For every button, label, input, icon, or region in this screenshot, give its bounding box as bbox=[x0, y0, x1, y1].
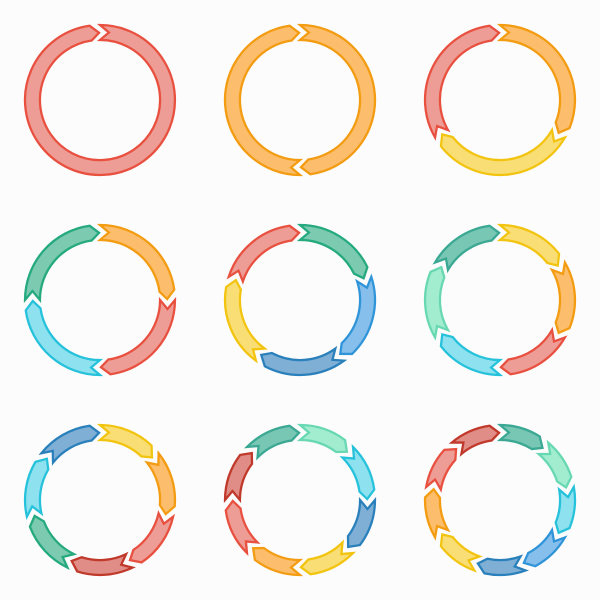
segment: red bbox=[426, 445, 457, 491]
segment: orange right bbox=[300, 25, 375, 174]
segment: cyan bbox=[26, 301, 100, 375]
segment: blue bbox=[523, 525, 565, 574]
segment: red bbox=[500, 317, 565, 389]
ring: eight segments bbox=[214, 414, 386, 586]
segment: dark red bbox=[452, 415, 500, 461]
segment: dark red bbox=[225, 453, 252, 500]
segment: red bbox=[214, 501, 266, 553]
segment: orange bbox=[414, 489, 456, 537]
segment: red bbox=[229, 213, 300, 293]
ring: four segments bbox=[25, 225, 175, 375]
segment: orange bbox=[133, 453, 191, 514]
ring: nine segments bbox=[414, 415, 581, 585]
segment: dark blue bbox=[41, 413, 99, 473]
segment: orange bbox=[500, 25, 575, 133]
ring: two segments bbox=[225, 25, 375, 175]
segment: cyan bbox=[334, 447, 386, 499]
segment: dark red bbox=[72, 538, 133, 590]
segment: dark blue bbox=[477, 548, 526, 585]
segment: dark blue bbox=[348, 500, 375, 547]
ring: one segment bbox=[25, 25, 175, 175]
segment: cyan bbox=[15, 459, 58, 517]
segment: orange bbox=[530, 263, 594, 334]
segment: red bbox=[398, 19, 528, 137]
segment: orange bbox=[100, 225, 174, 299]
segment: dark blue bbox=[258, 318, 344, 400]
ring: seven segments bbox=[15, 413, 191, 590]
segment: orange bbox=[253, 548, 300, 575]
segment: mint bbox=[406, 266, 470, 337]
segment: green bbox=[300, 225, 367, 278]
segment: red bbox=[130, 509, 173, 567]
segment: yellow bbox=[100, 425, 152, 457]
ring: three segments bbox=[398, 19, 575, 202]
segment: red bbox=[101, 300, 175, 374]
ring: six segments bbox=[406, 211, 594, 389]
segment: orange left bbox=[225, 26, 300, 175]
segment: mint bbox=[300, 425, 347, 452]
segment: red bbox=[25, 25, 175, 175]
segment: teal bbox=[500, 425, 542, 449]
segment: yellow bbox=[500, 225, 559, 266]
segment: mint bbox=[533, 443, 581, 488]
ring: five segments bbox=[201, 213, 392, 400]
segment: cyan bbox=[550, 487, 581, 533]
segment: yellow bbox=[201, 278, 287, 361]
segment: teal bbox=[435, 211, 500, 283]
segment: cyan bbox=[441, 334, 500, 375]
segment: blue bbox=[321, 277, 392, 357]
segment: yellow bbox=[301, 534, 353, 586]
segment: yellow bbox=[434, 84, 565, 202]
segment: green bbox=[21, 516, 82, 568]
segment: yellow bbox=[434, 533, 483, 570]
segment: teal bbox=[247, 414, 299, 466]
segment: green bbox=[25, 226, 99, 300]
